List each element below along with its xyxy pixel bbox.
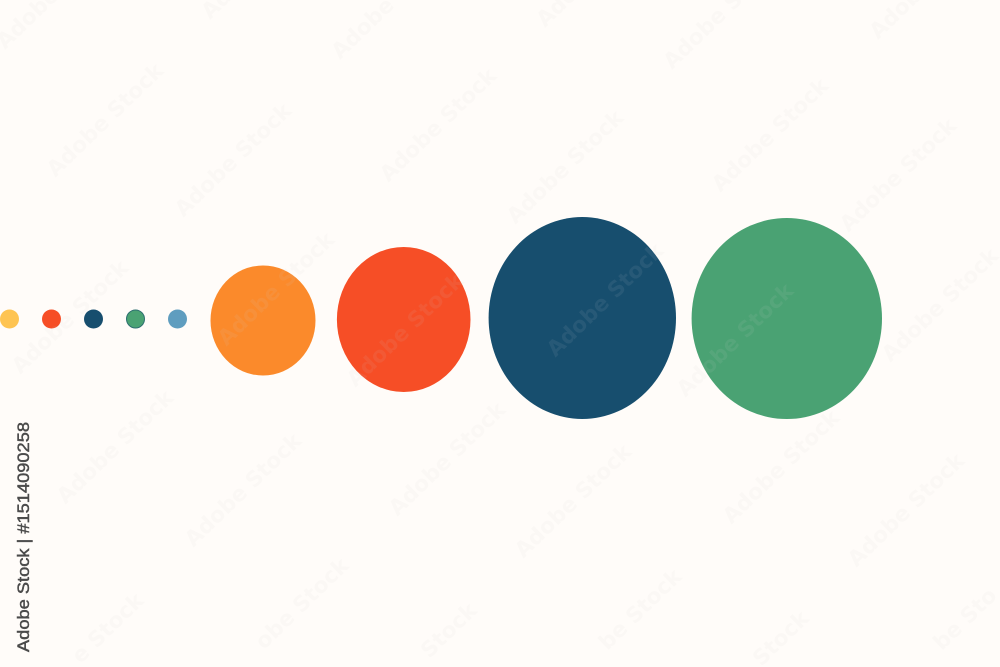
small dot: yellow [0,310,19,328]
watermark pattern: Adobe Stock [42,58,169,182]
watermark pattern: Adobe Stock [342,268,469,392]
watermark pattern: Adobe Stock [718,405,845,529]
watermark pattern: Adobe Stock [180,428,307,552]
stock image id label: Adobe Stock | #1514090258 [14,422,33,652]
watermark pattern: e Stock [67,588,150,667]
watermark pattern: Adobe Stock [877,243,1000,367]
watermark pattern: Adobe Stock [707,73,834,197]
large circle: red [337,247,471,392]
small dot: blue [168,310,187,328]
watermark pattern: Adobe Stock [502,105,629,229]
watermark pattern: Stock [416,598,483,663]
watermark pattern: Adobe Stock [375,63,502,187]
watermark pattern: Adobe Stock [213,227,340,351]
watermark pattern: Adobe Stock [835,113,962,237]
watermark pattern: Adobe Stock [52,385,179,509]
watermark pattern: Adobe Stock [384,397,511,521]
large circle: navy [489,217,676,419]
watermark pattern: be Sto [929,583,1000,655]
watermark pattern: Adobe Stock [672,278,799,402]
watermark pattern: Adobe Stock [843,448,970,572]
watermark pattern: Adobe Stock [542,238,669,362]
small dot: red [42,310,61,328]
watermark pattern: Adobe Stock [510,439,637,563]
small dot: green [126,310,144,328]
watermark pattern: obe Stock [251,553,355,655]
watermark pattern: be Stock [594,564,688,655]
large circle: orange [210,266,316,376]
large circle: green [692,218,882,419]
small dot: navy [84,310,103,328]
watermark pattern: Adobe Stock [7,255,134,379]
watermark pattern: Adobe Stock [170,98,297,222]
